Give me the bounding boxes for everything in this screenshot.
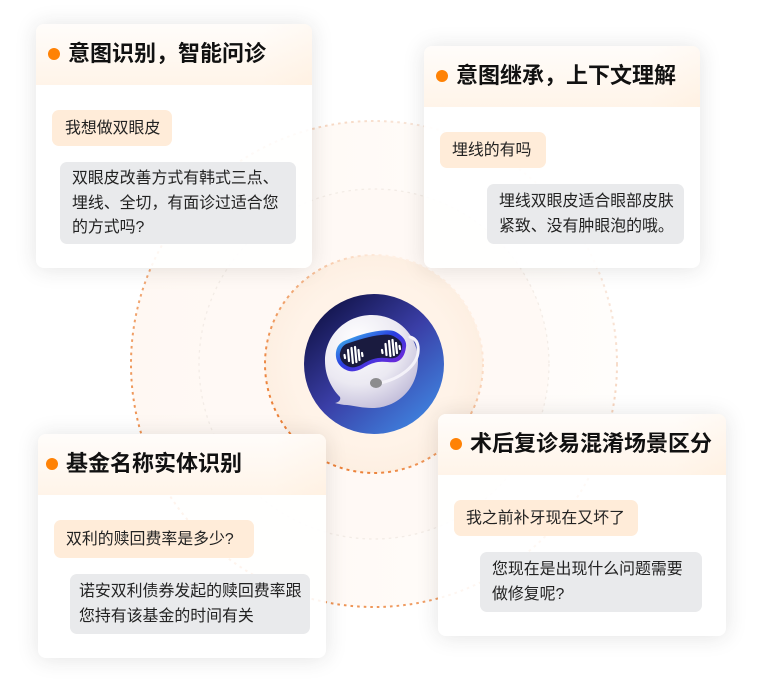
reply bubble: 埋线双眼皮适合眼部皮肤: [499, 193, 674, 210]
user bubble: 我之前补牙现在又坏了: [466, 510, 625, 527]
reply bubble: [70, 574, 310, 634]
bullet dot: [450, 438, 462, 450]
heading: 术后复诊易混淆场景区分: [470, 431, 712, 456]
heading: 基金名称实体识别: [66, 451, 242, 476]
user bubble: 双利的赎回费率是多少?: [66, 531, 234, 548]
user bubble: [454, 500, 638, 536]
user bubble: 我想做双眼皮: [65, 120, 160, 137]
reply bubble: 诺安双利债券发起的赎回费率跟: [79, 583, 301, 600]
reply bubble: 的方式吗?: [72, 219, 144, 236]
reply bubble: 双眼皮改善方式有韩式三点、: [72, 170, 279, 187]
panel: intent recognition: [36, 24, 312, 268]
user bubble: [440, 132, 546, 168]
user bubble: [54, 520, 254, 558]
user bubble: [52, 110, 172, 146]
heading: 意图继承，上下文理解: [456, 63, 676, 88]
reply bubble: 做修复呢?: [492, 586, 564, 602]
panel: intent inheritance: [424, 46, 700, 268]
central robot avatar: [304, 294, 444, 434]
user bubble: 埋线的有吗: [452, 142, 531, 159]
robot head: [325, 315, 418, 408]
reply bubble: 您现在是出现什么问题需要: [492, 561, 683, 578]
reply bubble: [480, 552, 702, 612]
visor eyes: [344, 340, 400, 363]
reply bubble: 您持有该基金的时间有关: [79, 608, 254, 624]
reply bubble: [487, 184, 684, 244]
bullet dot: [48, 48, 60, 60]
bullet dot: [46, 458, 58, 470]
reply bubble: 紧致、没有肿眼泡的哦。: [499, 218, 674, 234]
avatar disc: [304, 294, 444, 434]
heading: 意图识别，智能问诊: [68, 41, 266, 66]
panel: fund name entity recognition: [38, 434, 326, 658]
visor: [336, 330, 406, 371]
headset: [380, 337, 418, 383]
bullet dot: [436, 70, 448, 82]
reply bubble: [60, 162, 296, 244]
reply bubble: 埋线、全切，有面诊过适合您: [72, 194, 279, 212]
panel: post-surgery follow-up scenarios: [438, 414, 726, 636]
